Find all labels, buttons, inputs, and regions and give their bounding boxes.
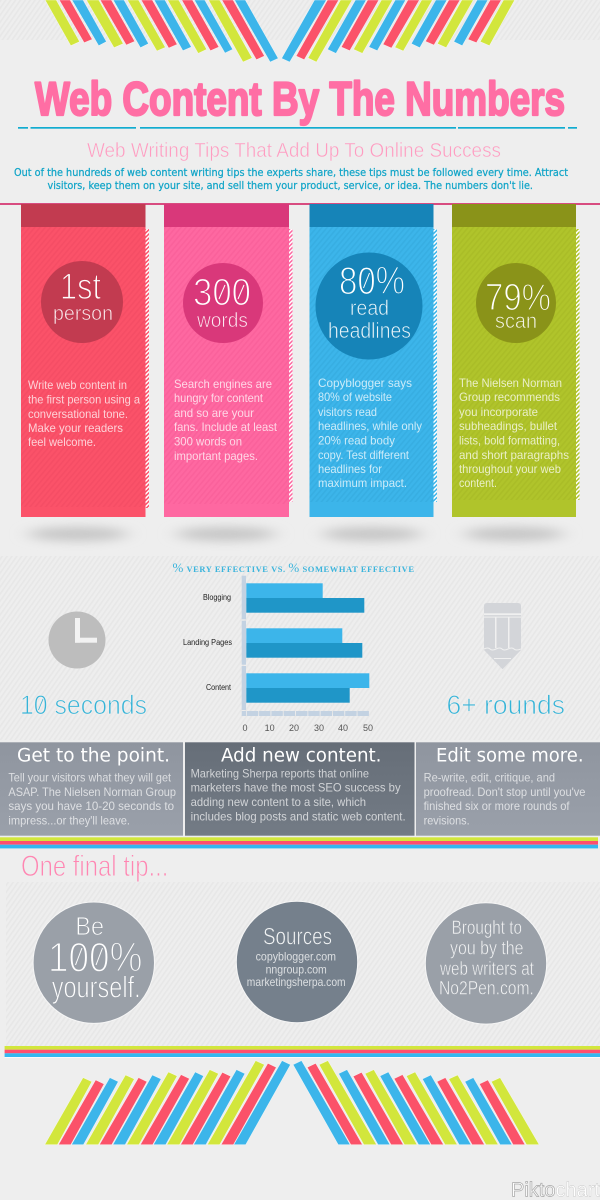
circle: sources: nngroup.com — [266, 962, 327, 976]
circle: brought to you by — [425, 903, 547, 1024]
text: edit some more — [424, 771, 586, 828]
axis numbers: 20 — [289, 723, 299, 733]
panel text: 79% scan: Group recommends — [459, 390, 560, 404]
panel text: 79% scan — [459, 376, 569, 490]
title underline rule — [18, 127, 577, 129]
panel: 79% scan — [452, 204, 580, 517]
panel text: 300 words: 300 words on — [174, 434, 242, 448]
badge: 79% scan — [476, 263, 556, 343]
panel text: 80% read headlines: Copyblogger says — [318, 376, 412, 390]
circle: sources: Sources — [263, 923, 332, 950]
text: get to the point — [8, 771, 176, 828]
badge: 80% read headlines: read — [350, 297, 389, 320]
bars: Blogging — [246, 583, 364, 613]
panel text: 300 words: fans. Include at least — [174, 420, 278, 434]
panel: 80% read headlines — [310, 204, 437, 517]
panel text: 1st person: Write web content in — [28, 378, 127, 392]
panel: 300 words — [164, 204, 292, 517]
panel text: 80% read headlines — [318, 376, 422, 490]
panel text: 80% read headlines: maximum impact. — [318, 476, 407, 490]
badge: 1st person: person — [53, 303, 113, 325]
badge: 300 words: 300 — [193, 272, 251, 314]
axis numbers: 40 — [338, 723, 348, 733]
circle: sources: copyblogger.com — [256, 950, 336, 964]
panel text: 300 words: Search engines are — [174, 377, 272, 391]
axis numbers: 0 — [242, 723, 248, 733]
panel text: 79% scan: content. — [459, 476, 497, 490]
text: get to the point: says you have 10-20 seconds to — [8, 799, 174, 813]
text: get to the point: impress...or they'll leave. — [8, 814, 130, 828]
panel text: 80% read headlines: headlines, while only — [318, 419, 422, 433]
pink divider line — [0, 203, 600, 205]
panel text: 79% scan: you incorporate — [459, 405, 538, 419]
circle: be 100% yourself — [33, 902, 154, 1023]
text: edit some more: revisions. — [424, 814, 470, 828]
badge: 79% scan: 79% — [485, 277, 551, 319]
heading: edit some more: Edit some more. — [436, 746, 584, 767]
text: get to the point: Tell your visitors what they will get — [8, 771, 172, 785]
chart title: % VERY EFFECTIVE VS. % SOMEWHAT EFFECTIVE — [172, 560, 414, 575]
panel text: 300 words — [174, 377, 278, 463]
badge: 300 words — [183, 263, 263, 343]
panel: get to the point — [0, 742, 183, 836]
axis numbers — [242, 723, 373, 733]
category labels: Blogging — [203, 593, 231, 602]
badge: 80% read headlines: 80% — [339, 260, 405, 303]
axis numbers: 50 — [363, 723, 373, 733]
badge: 80% read headlines — [316, 252, 422, 360]
intro text — [14, 166, 568, 192]
category labels — [183, 593, 232, 692]
badge: 300 words: words — [196, 310, 248, 332]
tri-colour band lower — [5, 1046, 600, 1058]
heading: get to the point: Get to the point. — [17, 746, 170, 767]
icon: clock — [48, 612, 106, 668]
text: add new content: Marketing Sherpa reports that online — [191, 766, 369, 780]
stat: 10 seconds: 10 seconds — [20, 690, 147, 720]
panel text: 79% scan: throughout your web — [459, 462, 561, 476]
text: add new content — [191, 766, 406, 823]
panel text: 1st person: Make your readers — [28, 421, 123, 435]
bar chart — [183, 576, 373, 733]
panel text: 79% scan: and short paragraphs — [459, 448, 569, 462]
panel text: 1st person: conversational tone. — [28, 407, 128, 421]
bottom slanted stripes decoration — [45, 1061, 539, 1145]
tri-colour band — [0, 837, 598, 848]
bars: Landing Pages — [246, 628, 362, 658]
panel text: 300 words: hungry for content — [174, 391, 264, 405]
axis numbers: 30 — [314, 723, 324, 733]
text: add new content: marketers have the most SEO success by — [191, 781, 401, 795]
bars: Content — [246, 673, 369, 703]
subtitle: Web Writing Tips That Add Up To Online Success — [87, 139, 501, 162]
panel text: 80% read headlines: visitors read — [318, 405, 377, 419]
circle: brought to you by: web writers at — [439, 959, 534, 980]
badge: 80% read headlines: headlines — [328, 318, 411, 343]
panel text: 1st person: the first person using a — [28, 392, 140, 406]
badge: 1st person: 1st — [60, 266, 102, 307]
heading: one final tip: One final tip... — [21, 850, 168, 883]
text: edit some more: Re-write, edit, critique, and — [424, 771, 555, 785]
circle: brought to you by: Brought to — [452, 918, 522, 939]
chart axes — [242, 576, 369, 716]
panel text: 1st person: feel welcome. — [28, 435, 96, 449]
stat: 6+ rounds: 6+ rounds — [446, 690, 565, 720]
badge: 79% scan: scan — [495, 310, 537, 333]
circle: brought to you by: you by the — [450, 938, 524, 959]
panel text: 79% scan: subheadings, bullet — [459, 419, 558, 433]
axis numbers: 10 — [265, 723, 275, 733]
intro text: visitors, keep them on your site, and sell them your product, service, or idea. The numbers don't lie. — [48, 179, 533, 192]
text: add new content: includes blog posts and static web content. — [191, 809, 406, 823]
panel text: 1st person — [28, 378, 140, 449]
panel text: 80% read headlines: 20% read body — [318, 434, 395, 448]
panel text: 79% scan: lists, bold formatting, — [459, 434, 560, 448]
top slanted stripes decoration — [45, 0, 515, 62]
circle: brought to you by: No2Pen.com. — [439, 978, 534, 999]
text: edit some more: finished six or more rounds of — [424, 799, 570, 813]
circle: be 100% yourself: 100% — [48, 934, 142, 981]
circle: sources: marketingsherpa.com — [247, 975, 346, 989]
panel: 1st person — [21, 204, 149, 517]
category labels: Content — [206, 683, 232, 692]
panel text: 80% read headlines: headlines for — [318, 462, 382, 476]
text: edit some more: proofread. Don't stop until you've — [424, 785, 586, 799]
panel text: 300 words: and so are your — [174, 406, 254, 420]
text: get to the point: ASAP. The Nielsen Norman Group — [8, 785, 176, 799]
circle: be 100% yourself: yourself. — [52, 969, 141, 1004]
panel shadows — [28, 527, 564, 541]
icon: pencil — [484, 603, 521, 669]
text: add new content: adding new content to a site, which — [191, 795, 366, 809]
panel: edit some more — [416, 742, 600, 836]
heading: add new content: Add new content. — [221, 746, 382, 767]
panel text: 80% read headlines: 80% of website — [318, 390, 392, 404]
panel text: 79% scan: The Nielsen Norman — [459, 376, 562, 390]
category labels: Landing Pages — [183, 638, 232, 647]
badge: 1st person — [41, 261, 123, 343]
panel text: 80% read headlines: copy. Test different — [318, 448, 410, 462]
circle: be 100% yourself: Be — [75, 911, 104, 941]
panel: add new content — [185, 742, 414, 836]
panel text: 300 words: important pages. — [174, 449, 258, 463]
circle: sources — [236, 901, 358, 1023]
